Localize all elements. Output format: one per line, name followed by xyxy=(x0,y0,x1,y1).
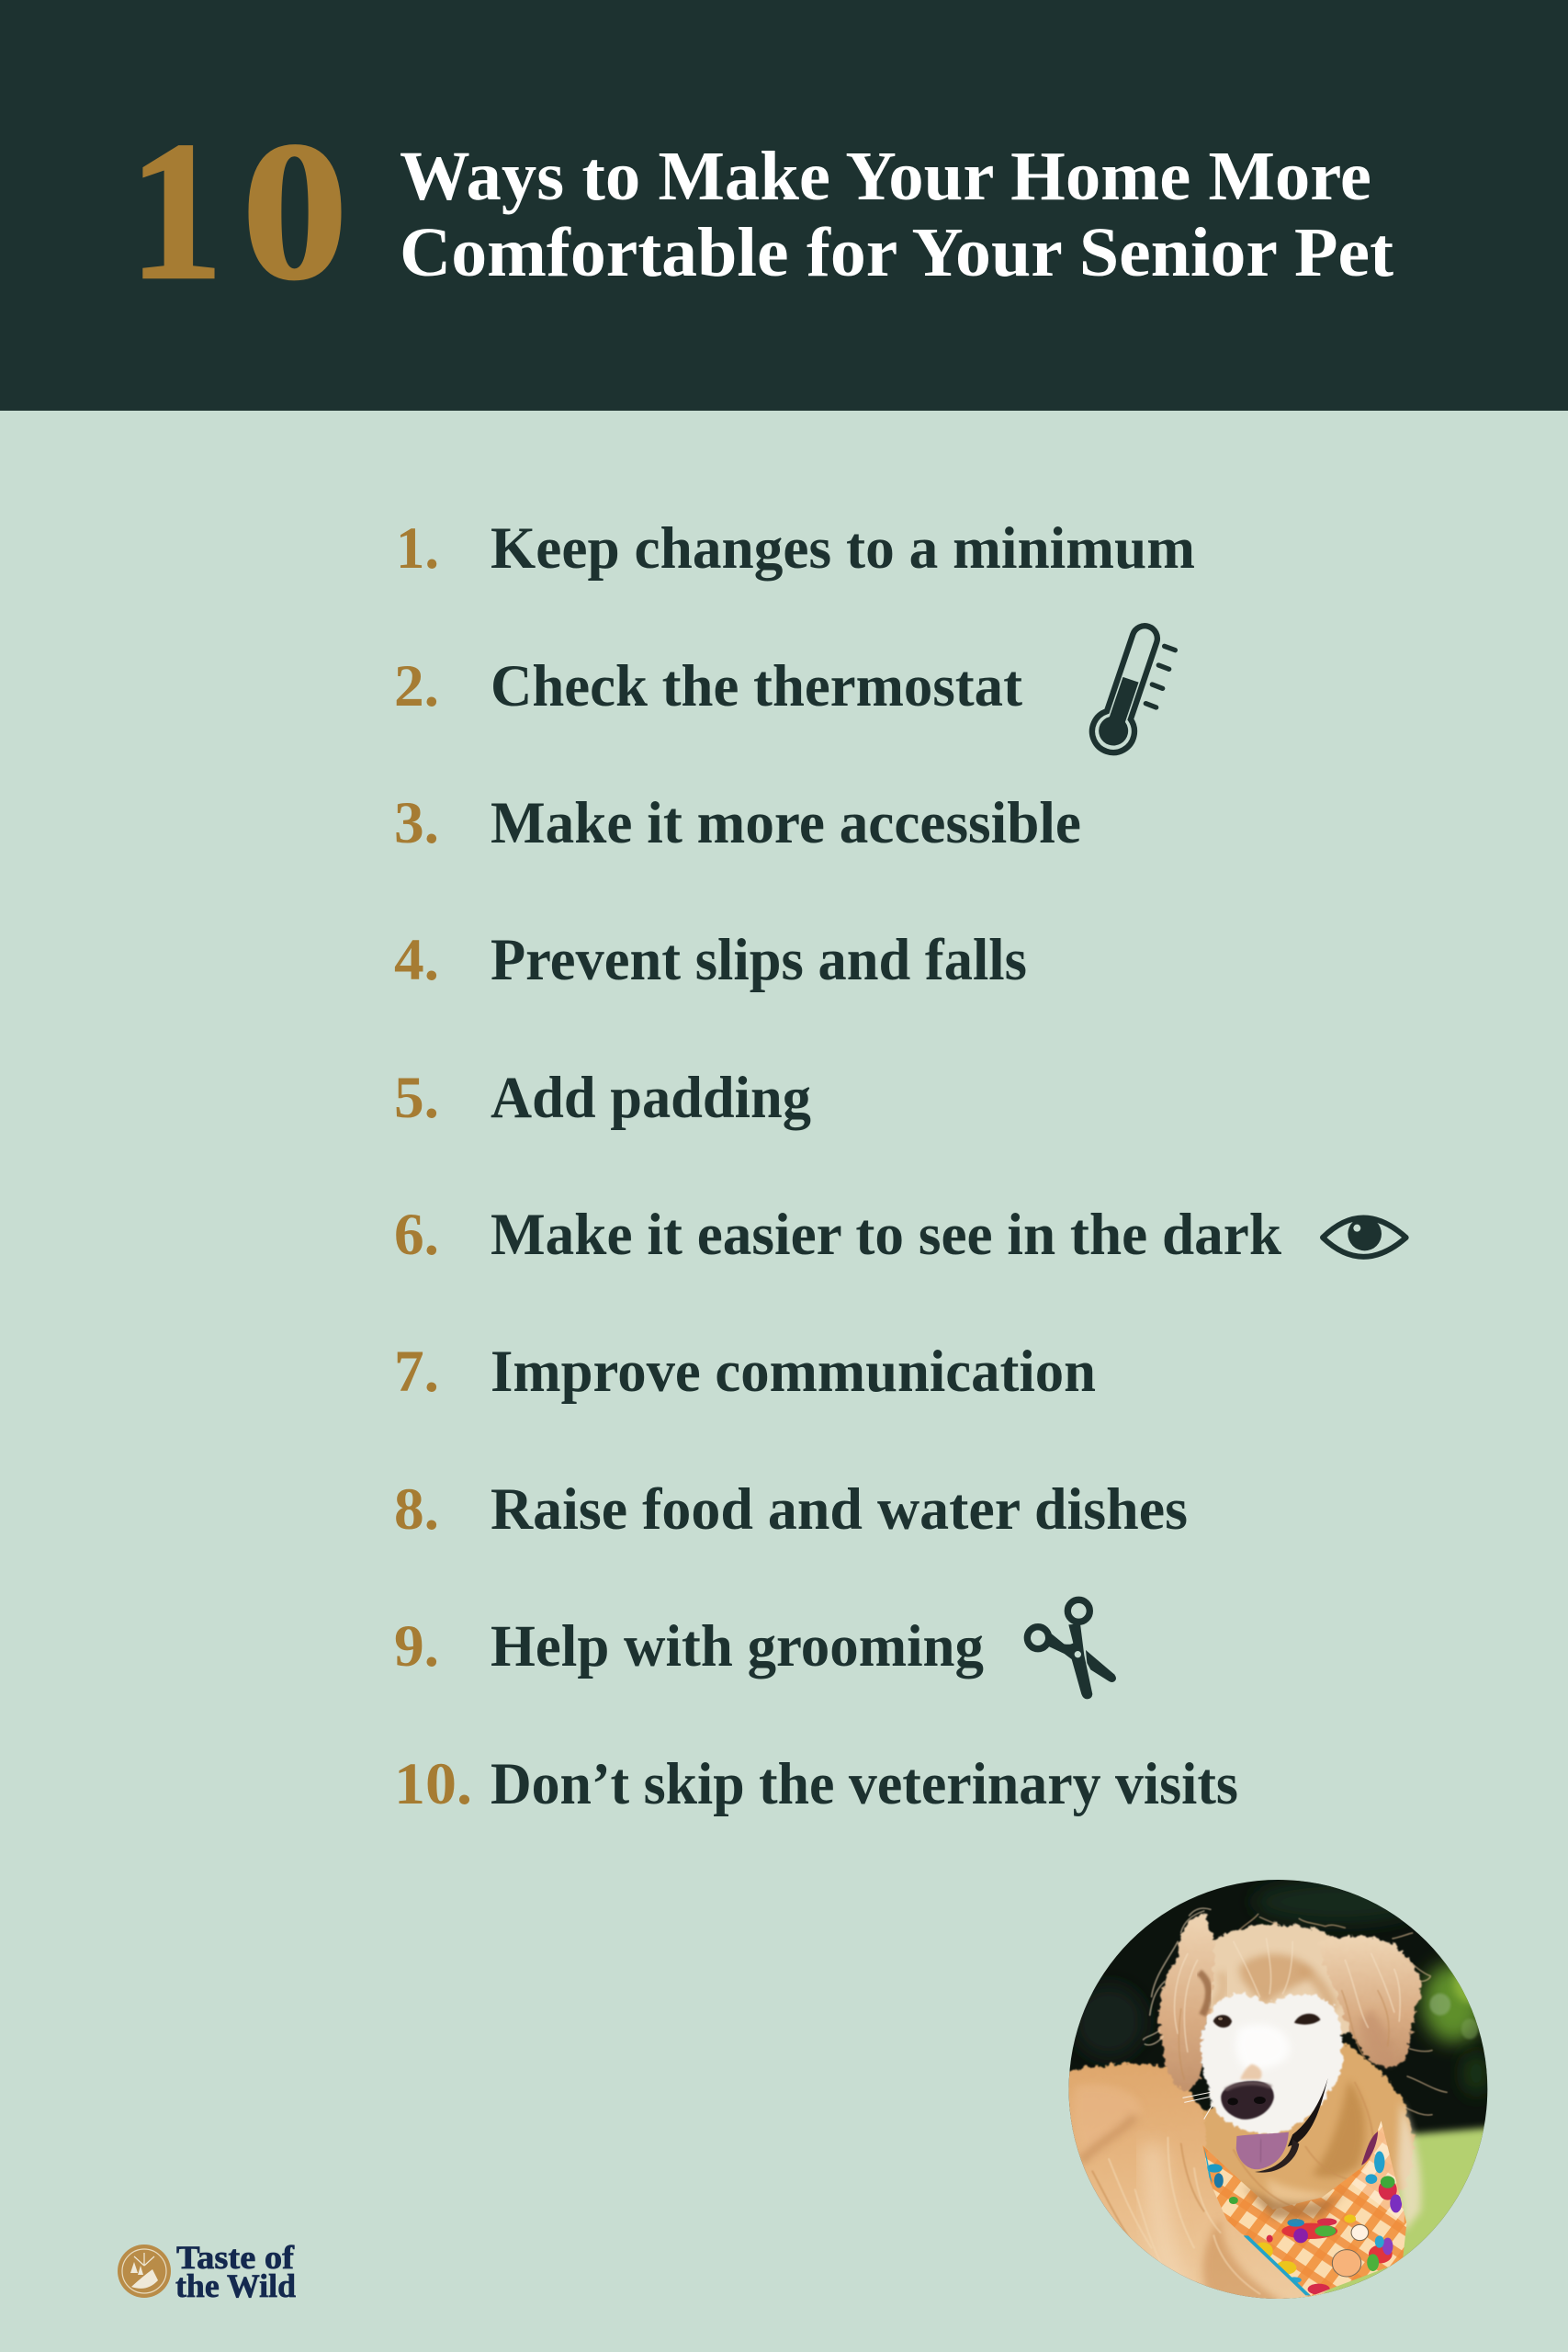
logo: Taste of the Wild xyxy=(118,2239,296,2304)
tip 2: 2. xyxy=(394,653,439,719)
eyes xyxy=(1213,2015,1232,2028)
title: Comfortable for Your Senior Pet xyxy=(400,214,1393,291)
logo badge xyxy=(118,2245,171,2298)
right side fur and neck xyxy=(1203,2033,1414,2211)
logo wordmark xyxy=(175,2239,296,2304)
logo wordmark: the Wild xyxy=(175,2267,296,2304)
bandana xyxy=(1203,2120,1407,2297)
white face xyxy=(1201,1994,1343,2133)
head crown xyxy=(1201,1925,1354,2033)
fur strands xyxy=(1092,1908,1447,2294)
dog body xyxy=(1069,2061,1328,2299)
icon: thermometer xyxy=(1087,620,1175,758)
tip 9: Help with grooming xyxy=(491,1613,984,1679)
tip 4: 4. xyxy=(394,927,439,993)
big number 10: 0 xyxy=(242,101,348,321)
title xyxy=(400,138,1393,291)
tip 8: Raise food and water dishes xyxy=(491,1476,1188,1543)
tip 7: 7. xyxy=(394,1339,439,1405)
tip 3: Make it more accessible xyxy=(491,790,1081,856)
bandana collar shadow xyxy=(1361,2132,1378,2165)
tip 7: Improve communication xyxy=(491,1339,1096,1405)
tip 4: Prevent slips and falls xyxy=(491,927,1027,993)
icon: scissors xyxy=(1027,1600,1116,1699)
mouth xyxy=(1288,2078,1328,2147)
tongue xyxy=(1236,2132,1289,2169)
tip 9: 9. xyxy=(394,1613,439,1679)
tip 5: 5. xyxy=(394,1065,439,1131)
tip 6: 6. xyxy=(394,1202,439,1268)
big number 10 xyxy=(129,101,348,321)
background foliage xyxy=(1422,1963,1484,2042)
right ear xyxy=(1319,1936,1420,2067)
title: Ways to Make Your Home More xyxy=(400,138,1371,215)
tip 5: Add padding xyxy=(491,1065,811,1131)
list of tips xyxy=(394,515,1282,1817)
logo wordmark: Taste of xyxy=(176,2239,295,2276)
photo: senior golden retriever xyxy=(1069,1880,1488,2299)
icon: eye xyxy=(1323,1217,1406,1257)
whiskers xyxy=(1182,2092,1213,2120)
nose xyxy=(1221,2081,1274,2120)
tip 6: Make it easier to see in the dark xyxy=(491,1202,1282,1268)
header band xyxy=(0,0,1568,411)
tip 8: 8. xyxy=(394,1476,439,1543)
tip 10: Don’t skip the veterinary visits xyxy=(491,1751,1238,1817)
tip 2: Check the thermostat xyxy=(491,653,1022,719)
tip 3: 3. xyxy=(394,790,439,856)
tip 10: 10. xyxy=(394,1751,472,1817)
tip 1: Keep changes to a minimum xyxy=(491,515,1195,582)
left ear xyxy=(1159,1913,1215,2090)
big number 10: 1 xyxy=(129,101,223,321)
tip 1: 1. xyxy=(396,515,439,582)
